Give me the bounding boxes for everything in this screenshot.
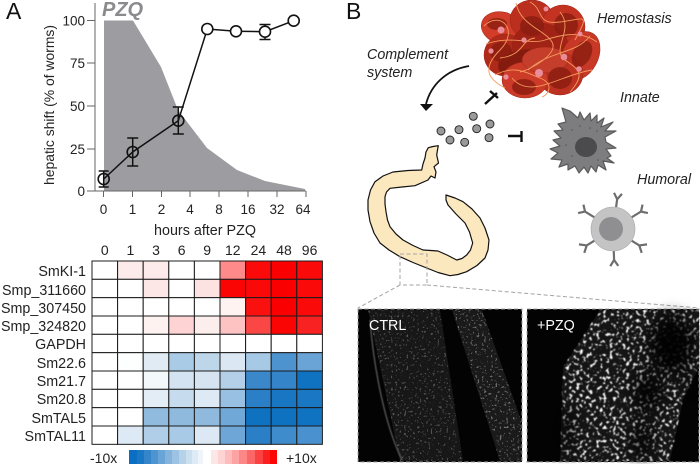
fluorescence texture	[368, 310, 463, 461]
tissue bands	[368, 310, 463, 461]
antibodies	[578, 193, 648, 266]
label: Complement system	[367, 47, 449, 81]
y axis title: hepatic shift (% of worms)	[41, 25, 57, 185]
heatmap row labels: GAPDH	[35, 337, 86, 353]
heatmap row labels: Smp_307450	[1, 301, 86, 317]
dark patches in tissue	[558, 315, 700, 460]
heatmap row labels: SmKI-1	[38, 264, 86, 280]
PZQ concentration area	[104, 20, 305, 191]
heatmap row labels	[1, 264, 86, 445]
axes	[87, 3, 306, 197]
arrow: complement cascade	[420, 66, 469, 111]
cell shading	[487, 13, 597, 95]
x tick labels: 4	[186, 202, 194, 217]
x tick labels	[100, 202, 311, 217]
tissue region	[560, 310, 699, 461]
heatmap row labels: SmTAL5	[31, 411, 86, 427]
heatmap column labels: 9	[203, 242, 211, 258]
x tick labels: 2	[158, 202, 165, 217]
fibrin strands	[484, 2, 597, 97]
fluorescence blobs	[560, 310, 699, 461]
heatmap row labels: SmTAL11	[25, 429, 86, 445]
heatmap cells	[92, 261, 322, 444]
heatmap column labels: 6	[178, 242, 186, 258]
y tick labels: 75	[70, 56, 85, 71]
heatmap column labels: 0	[101, 242, 109, 258]
heatmap row labels: Sm20.8	[37, 392, 86, 408]
red blood cells	[478, 0, 608, 98]
+PZQ label: +PZQ	[537, 318, 575, 334]
inhibition marker towards innate cell	[508, 131, 522, 142]
data line and error bars	[99, 21, 294, 187]
label: Complement system: Complement	[367, 47, 449, 63]
x tick labels: 16	[240, 202, 256, 217]
heatmap column labels: 1	[127, 242, 135, 258]
heatmap row labels: Smp_324820	[1, 319, 86, 335]
nucleus	[575, 137, 597, 157]
y tick labels: 0	[77, 184, 85, 199]
label: Innate: Innate	[620, 90, 660, 106]
heatmap row labels: Sm21.7	[37, 374, 86, 390]
line chart: hepatic shift over time	[41, 0, 311, 239]
cytoplasm dots	[565, 125, 599, 161]
inhibition marker towards clot	[485, 91, 498, 104]
y tick labels: 25	[70, 142, 85, 157]
icon: B cell with antibodies	[578, 193, 648, 266]
cell body	[591, 207, 635, 251]
x tick labels: 64	[295, 202, 311, 217]
icon: blood clot	[478, 0, 608, 98]
zoom selection box and guide lines	[358, 254, 699, 308]
y tick labels: 100	[62, 14, 85, 28]
x axis title: hours after PZQ	[154, 223, 256, 239]
icon: innate immune cell	[550, 108, 616, 173]
label: Hemostasis: Hemostasis	[597, 11, 672, 27]
heatmap column labels: 96	[302, 242, 318, 258]
y tick labels: 50	[70, 99, 85, 114]
secreted molecules	[437, 112, 494, 146]
x tick labels: 8	[215, 202, 223, 217]
colour scale legend	[90, 450, 317, 464]
bright tissue edges	[370, 320, 402, 460]
nucleus	[599, 217, 623, 241]
label: Humoral: Humoral	[637, 172, 692, 188]
x tick labels: 32	[269, 202, 285, 217]
icon: schistosome worm	[368, 146, 489, 276]
label: Complement system: system	[367, 65, 412, 81]
x tick labels: 1	[129, 202, 136, 217]
micrograph: +PZQ	[527, 309, 700, 462]
heatmap	[1, 242, 322, 464]
heatmap column labels: 12	[225, 242, 241, 258]
micrograph: CTRL	[358, 309, 522, 462]
CTRL label: CTRL	[369, 318, 406, 334]
heatmap row labels: Smp_311660	[2, 283, 86, 299]
heatmap column labels: 3	[152, 242, 160, 258]
platelets	[488, 6, 582, 80]
x tick labels: 0	[100, 202, 107, 217]
heatmap column labels: 24	[251, 242, 266, 258]
heatmap row labels: Sm22.6	[37, 356, 86, 372]
y tick labels	[62, 14, 85, 199]
data markers	[98, 15, 299, 185]
heatmap column labels	[101, 242, 318, 258]
heatmap column labels: 48	[276, 242, 292, 258]
